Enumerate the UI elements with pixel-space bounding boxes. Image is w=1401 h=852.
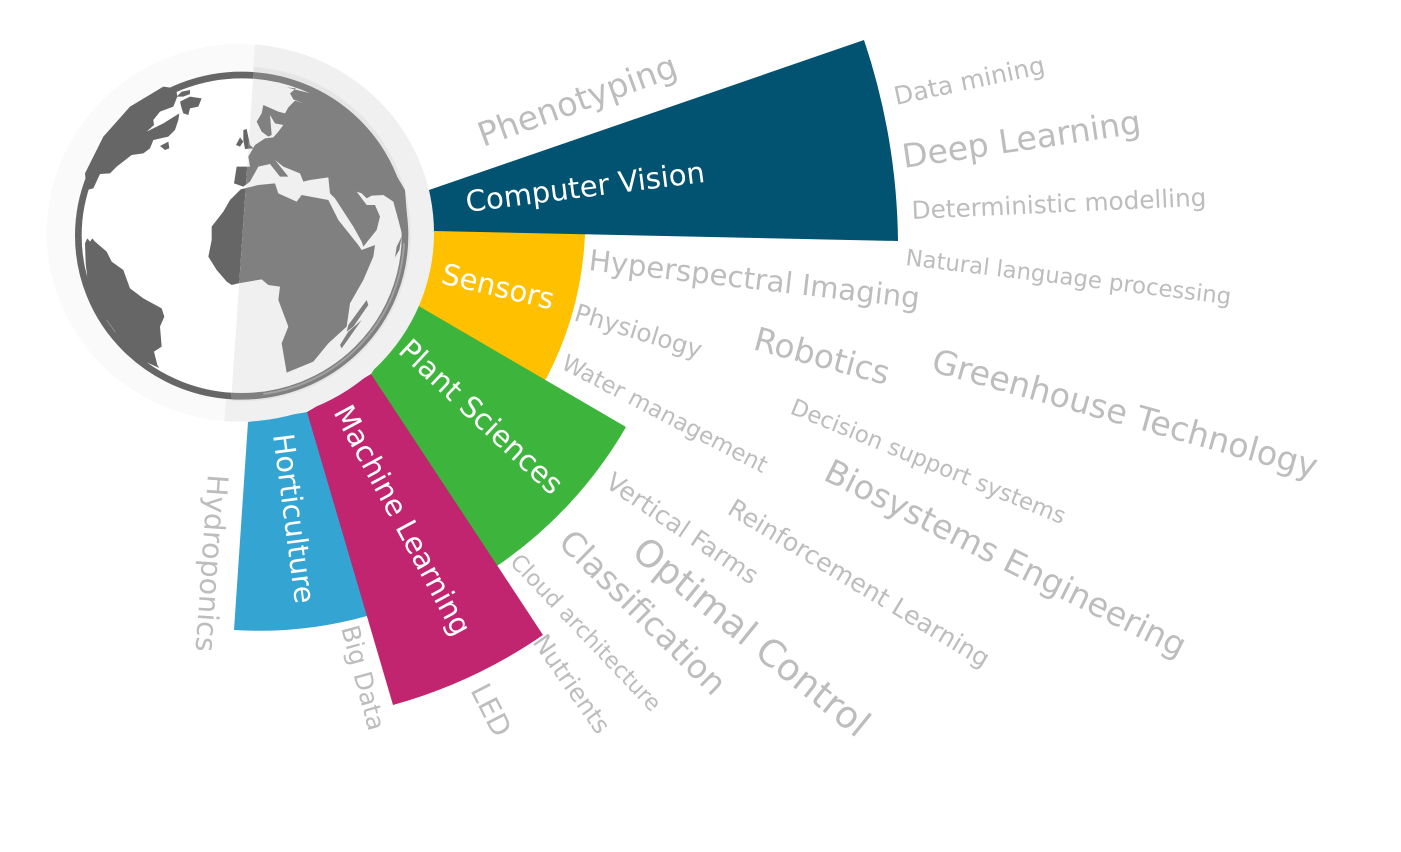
wedge: Plant Sciences: Plant Sciences (392, 332, 570, 501)
wedge: Horticulture (234, 408, 376, 631)
wedge: Plant Sciences (362, 305, 626, 572)
keyword: Cloud architecture: Cloud architecture (505, 549, 666, 717)
wedge: Sensors (410, 227, 585, 385)
keyword: Physiology: Physiology (571, 298, 706, 364)
keyword: Natural language processing: Natural language processing (904, 245, 1233, 310)
keyword: LED: LED (464, 678, 518, 742)
keyword: Nutrients: Nutrients (527, 629, 616, 739)
keyword: Big Data: Big Data (335, 622, 391, 733)
wedge: Horticulture: Horticulture (266, 431, 322, 605)
wedge: Machine Learning (307, 374, 543, 705)
keyword: Greenhouse Technology: Greenhouse Technology (928, 341, 1322, 486)
wedge: Computer Vision: Computer Vision (464, 155, 707, 219)
keyword: Reinforcement Learning: Reinforcement Learning (723, 493, 995, 673)
keyword: Decision support systems: Decision support systems (787, 394, 1069, 530)
keyword: Robotics: Robotics (750, 320, 894, 393)
keyword: Water management: Water management (557, 350, 772, 479)
wedge: Computer Vision (429, 40, 898, 241)
keyword: Deterministic modelling: Deterministic modelling (911, 183, 1207, 225)
keyword: Vertical Farms: Vertical Farms (601, 467, 764, 590)
keyword: Biosystems Engineering: Biosystems Engineering (818, 451, 1193, 665)
keyword: Data mining: Data mining (891, 51, 1047, 111)
wedge: Sensors: Sensors (438, 257, 558, 316)
keyword: Optimal Control: Optimal Control (624, 529, 878, 746)
keyword: Phenotyping: Phenotyping (472, 46, 682, 155)
keyword: Deep Learning: Deep Learning (899, 102, 1143, 176)
keyword: Hyperspectral Imaging: Hyperspectral Imaging (587, 243, 922, 315)
globe icon (47, 44, 434, 422)
keyword: Hydroponics: Hydroponics (189, 474, 235, 653)
keyword: Classification: Classification (551, 522, 734, 703)
wedge: Machine Learning: Machine Learning (327, 399, 478, 641)
